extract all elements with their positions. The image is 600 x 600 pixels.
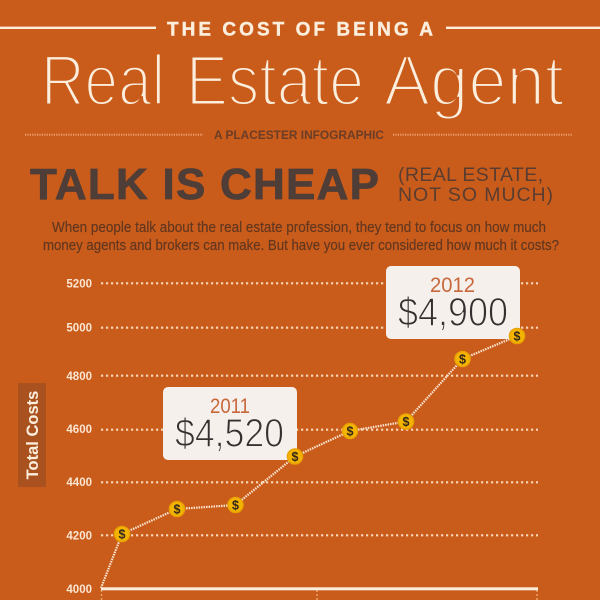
callout: 2011: $4,520 <box>175 412 284 456</box>
y-axis labels: 4200 <box>66 530 92 542</box>
data point coins: $ <box>459 352 466 366</box>
y-axis labels <box>66 278 92 596</box>
title: Real <box>41 41 165 121</box>
title: Agent <box>384 41 564 121</box>
data point coins: $ <box>403 415 410 429</box>
y-axis labels: 4000 <box>66 584 92 596</box>
intro paragraph <box>43 219 559 254</box>
data point coins: $ <box>292 450 299 464</box>
side heading: NOT SO MUCH) <box>398 184 553 206</box>
data point coins <box>114 328 525 542</box>
y-axis labels: 4800 <box>66 371 92 383</box>
data point coins: $ <box>119 528 126 542</box>
data point coins: $ <box>232 498 239 512</box>
callout: 2011 <box>163 387 297 460</box>
y-axis labels: 5000 <box>66 322 92 334</box>
y-axis labels: 4400 <box>66 477 92 489</box>
y-axis labels: 4600 <box>66 424 92 436</box>
data point coins: $ <box>514 330 521 344</box>
callout: 2012: $4,900 <box>398 290 508 334</box>
y-axis title: Total Costs <box>24 391 42 479</box>
y-axis labels: 5200 <box>66 278 92 290</box>
data point coins: $ <box>347 424 354 438</box>
callout: 2011: 2011 <box>210 395 250 418</box>
title <box>41 41 564 121</box>
title: Estate <box>186 41 364 121</box>
side heading <box>398 164 553 206</box>
callout: 2012: 2012 <box>430 274 475 297</box>
header kicker: THE COST OF BEING A <box>167 20 433 40</box>
subtitle with dotted rules: A PLACESTER INFOGRAPHIC <box>214 130 384 142</box>
intro paragraph: When people talk about the real estate profession, they tend to focus on how much <box>52 219 546 236</box>
y-axis title <box>18 383 46 487</box>
side heading: (REAL ESTATE, <box>398 164 543 186</box>
line chart <box>66 278 538 600</box>
callout: 2012 <box>386 266 520 339</box>
data point coins: $ <box>174 502 181 516</box>
heading: talk is cheap: TALK IS CHEAP <box>30 160 379 209</box>
